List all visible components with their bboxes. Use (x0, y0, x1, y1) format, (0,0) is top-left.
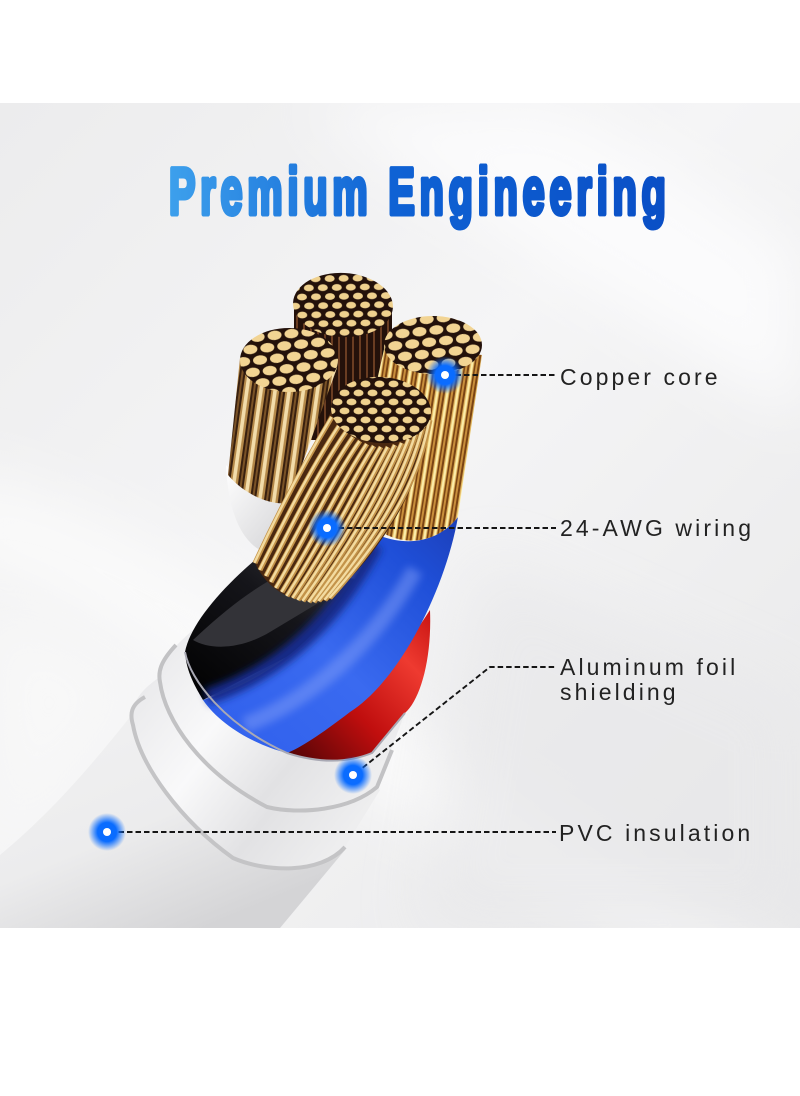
cable outer jacket (0, 790, 345, 928)
callout: copper core: Copper core (560, 364, 721, 390)
callout: PVC insulation (88, 813, 753, 851)
blue wire (203, 517, 458, 753)
white conductor cone (226, 466, 281, 550)
opening rim (185, 652, 405, 761)
top copper bundle (291, 270, 395, 440)
illustration: cable (0, 270, 482, 928)
right copper bundle (378, 316, 482, 541)
front copper bundle (254, 374, 433, 602)
photo background panel (0, 103, 800, 928)
left copper bundle (228, 328, 338, 503)
callout: aluminum foil shielding: Aluminum foil (560, 654, 738, 680)
callout: 24-AWG wiring (308, 509, 754, 547)
callout: PVC insulation: PVC insulation (559, 820, 753, 846)
title: Premium Engineering (169, 155, 666, 229)
callout: 24-AWG wiring: 24-AWG wiring (560, 515, 754, 541)
red wire (287, 610, 430, 761)
callout: aluminum foil shielding: shielding (560, 679, 679, 705)
callout: copper core (426, 356, 721, 394)
black wire (185, 560, 360, 700)
collar ring lower (131, 677, 380, 868)
collar ring upper (159, 630, 405, 811)
callout: aluminum foil shielding (334, 654, 738, 794)
